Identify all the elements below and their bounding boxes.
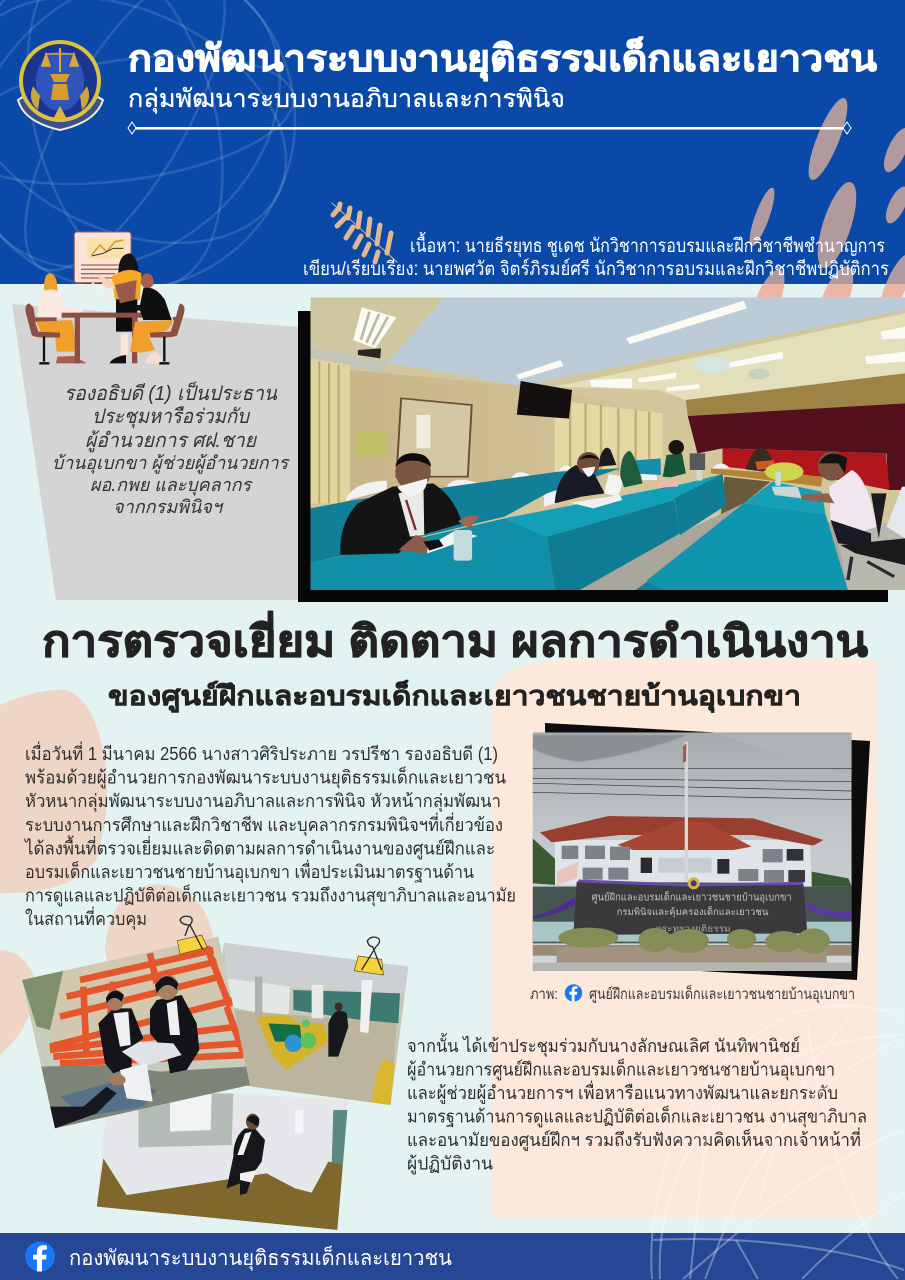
- caption text: ผู้อำนวยการ ศฝ.ชาย: [85, 430, 257, 453]
- sub heading: ของศูนย์ฝึกและอบรมเด็กและเยาวชนชายบ้านอุเบกขา: [108, 678, 801, 713]
- main photo: meeting room: [310, 297, 905, 590]
- teal tables: [310, 468, 620, 563]
- chair left: [25, 303, 60, 338]
- standing woman: [95, 253, 143, 363]
- paragraph one: เมื่อวันที่ 1 มีนาคม 2566 นางสาวศิริประภาย วรปรีชา รองอธิบดี (1): [25, 741, 498, 764]
- footer text: กองพัฒนาระบบงานยุติธรรมเด็กและเยาวชน: [69, 1244, 452, 1271]
- right seated man: [117, 273, 173, 363]
- man left: [340, 453, 479, 561]
- building photo: กระทรวงยุติธรรม: [656, 924, 731, 935]
- subtitle: กลุ่มพัฒนาระบบงานอภิบาลและการพินิจ: [128, 85, 565, 114]
- caption text: บ้านอุเบกขา ผู้ช่วยผู้อำนวยการ: [52, 453, 290, 474]
- photo collage: [17, 916, 410, 1233]
- paragraph two: จากนั้น ได้เข้าประชุมร่วมกับนางลักษณเลิศ นันทิพานิชย์: [407, 1033, 800, 1057]
- caption text: [52, 381, 290, 517]
- paragraph two: มาตรฐานด้านการดูแลและปฏิบัติต่อเด็กและเยาวชน งานสุขาภิบาล: [407, 1104, 867, 1128]
- photo: men on orange bench: [17, 933, 257, 1133]
- header divider line: [128, 122, 851, 134]
- grey caption panel: [12, 304, 298, 600]
- main heading: การตรวจเยี่ยม ติดตาม ผลการดำเนินงาน: [42, 611, 869, 666]
- photo: room with man: [96, 1093, 348, 1230]
- paragraph one: หัวหนากลุ่มพัฒนาระบบงานอภิบาลและการพินิจ หัวหน้ากลุ่มพัฒนา: [25, 791, 501, 812]
- paragraph two: [407, 1033, 867, 1174]
- paragraph one: [23, 741, 516, 930]
- peach blobs: [0, 690, 214, 1055]
- building photo shadow: [545, 723, 870, 980]
- caption text: ผอ.กพย และบุคลากร: [90, 475, 253, 496]
- title: กองพัฒนาระบบงานยุติธรรมเด็กและเยาวชน: [128, 35, 877, 82]
- man middle: [555, 440, 705, 508]
- paragraph one: การดูแลและปฏิบัติต่อเด็กและเยาวชน รวมถึงงานสุขาภิบาลและอนามัย: [25, 884, 516, 907]
- icon: binder clip left: [177, 916, 207, 954]
- footer facebook icon: [25, 1242, 55, 1272]
- paragraph two: และผู้ช่วยผู้อำนวยการฯ เพื่อหารือแนวทางพัฒนาและยกระดับ: [407, 1080, 838, 1104]
- decorative petals: [750, 98, 905, 298]
- photo caption: [530, 984, 855, 1004]
- footer band: [0, 1233, 905, 1280]
- paragraph one: พร้อมด้วยผู้อำนวยการกองพัฒนาระบบงานยุติธรรมเด็กและเยาวชน: [25, 766, 506, 789]
- header band: [0, 0, 905, 284]
- paragraph one: อบรมเด็กและเยาวชนชายบ้านอุเบกขา เพื่อประเมินมาตรฐานด้าน: [25, 859, 474, 883]
- lamps: [353, 301, 905, 392]
- left seated woman: [36, 273, 87, 363]
- logo emblem: [18, 40, 103, 130]
- caption text: ประชุมหารือร่วมกับ: [92, 406, 251, 429]
- paragraph one: ในสถานที่ควบคุม: [25, 906, 147, 930]
- photo: open hall: [207, 943, 410, 1106]
- woman at head table + flowers: [746, 447, 804, 486]
- icon: binder clip right: [354, 937, 383, 975]
- peach panel: [492, 660, 878, 1218]
- building photo: ศูนย์ฝึกและอบรมเด็กและเยาวชนชายบ้านอุเบกขา: [592, 889, 792, 903]
- icon: palm leaf: [332, 203, 397, 262]
- table: [62, 313, 151, 363]
- credit lines: [303, 232, 889, 280]
- building photo: กรมพินิจและคุ้มครองเด็กและเยาวชน: [617, 905, 769, 918]
- globe pattern: top left: [0, 0, 339, 329]
- man right: [772, 451, 905, 580]
- photo caption: ศูนย์ฝึกและอบรมเด็กและเยาวชนชายบ้านอุเบกขา: [589, 984, 855, 1004]
- paragraph two: และอนามัยของศูนย์ฝึกฯ รวมถึงรับฟังความคิดเห็นจากเจ้าหน้าที่: [407, 1127, 861, 1151]
- paragraph one: ระบบงานการศึกษาและฝึกวิชาชีพ และบุคลากรกรมพินิจฯที่เกี่ยวข้อง: [25, 812, 503, 836]
- globe pattern: bottom right: [651, 1006, 904, 1279]
- chair right: [150, 303, 184, 338]
- main photo shadow: [298, 311, 888, 602]
- photo caption: ภาพ:: [530, 986, 558, 1003]
- paragraph one: ได้ลงพื้นที่ตรวจเยี่ยมและติดตามผลการดำเนินงานของศูนย์ฝึกและ: [23, 835, 495, 859]
- paragraph two: ผู้อำนวยการศูนย์ฝึกและอบรมเด็กและเยาวชนชายบ้านอุเบกขา: [407, 1058, 835, 1080]
- floor: [832, 523, 905, 590]
- back chairs: [346, 463, 730, 507]
- caption text: จากกรมพินิจฯ: [113, 497, 224, 517]
- illustration: meeting people: [25, 232, 184, 363]
- icon: facebook: [565, 984, 582, 1002]
- paragraph two: ผู้ปฏิบัติงาน: [407, 1154, 493, 1174]
- caption text: รองอธิบดี (1) เป็นประธาน: [64, 381, 278, 405]
- building photo: [533, 732, 852, 971]
- chart board: [74, 232, 131, 283]
